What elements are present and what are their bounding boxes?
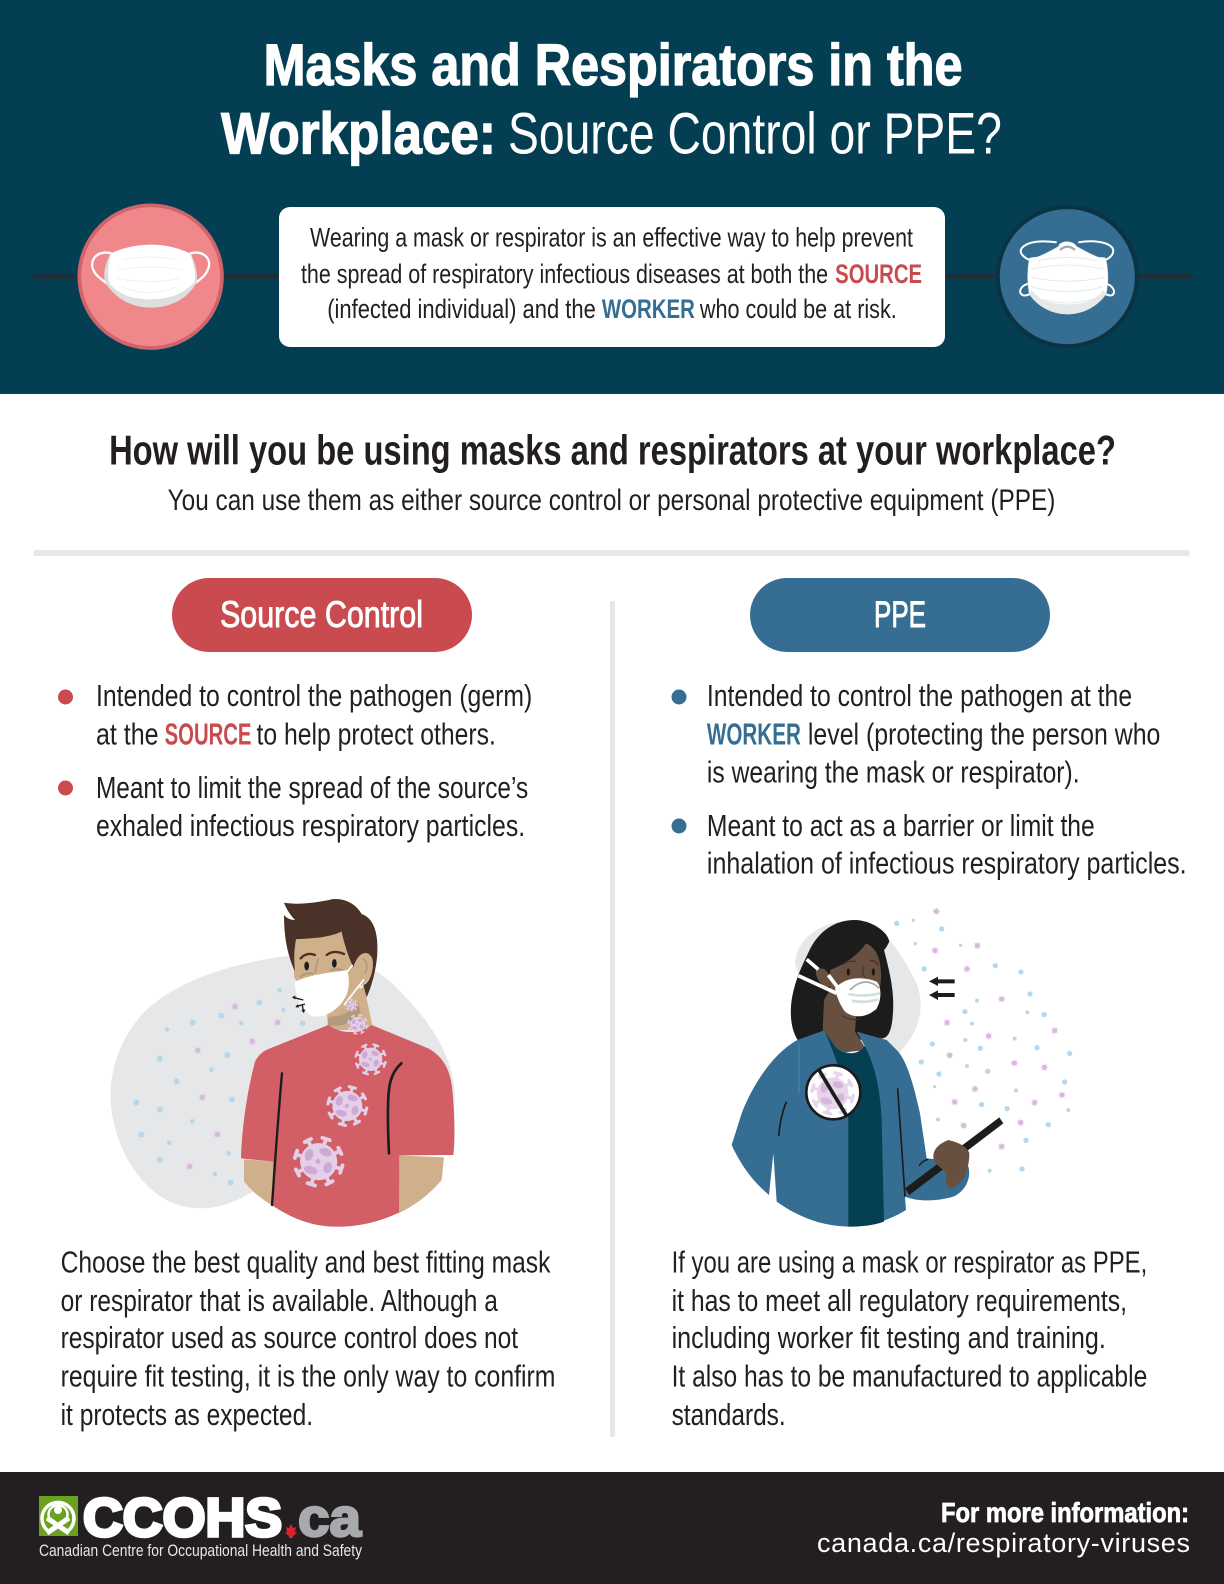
PPE guidance text <box>672 1246 1147 1432</box>
intro callout: SOURCE <box>835 258 922 289</box>
CCOHS logo: Canadian Centre for Occupational Health and Safety <box>39 1541 362 1560</box>
more information link: canada.ca/respiratory-viruses <box>817 1528 1190 1558</box>
title: Masks and Respirators in the <box>264 33 962 98</box>
main question heading: You can use them as either source control or personal protective equipment (PPE) <box>168 484 1055 517</box>
source control guidance text: Choose the best quality and best fitting mask <box>61 1246 551 1279</box>
title <box>221 33 1002 167</box>
illustration: woman wearing a respirator, particles blocked <box>732 908 1072 1227</box>
panel: source control <box>58 578 555 1432</box>
PPE guidance text: standards. <box>672 1399 786 1432</box>
source control bullets <box>58 680 532 843</box>
panel: PPE <box>672 578 1187 1432</box>
PPE bullets: is wearing the mask or respirator). <box>707 757 1080 790</box>
CCOHS logo: ca <box>298 1488 362 1548</box>
header band <box>0 0 1224 394</box>
intro callout: Wearing a mask or respirator is an effective way to help prevent <box>310 221 913 252</box>
source control bullets: Meant to limit the spread of the source’s <box>96 772 528 805</box>
PPE guidance text: it has to meet all regulatory requirements, <box>672 1285 1127 1318</box>
intro callout: who could be at risk. <box>699 293 897 324</box>
pill: source control: Source Control <box>220 594 423 635</box>
source control bullets: to help protect others. <box>257 718 496 751</box>
more information link <box>817 1497 1190 1558</box>
CCOHS logo: CCOHS <box>83 1488 282 1548</box>
pill: source control <box>172 578 472 652</box>
title: Source Control or PPE? <box>508 102 1002 167</box>
icon: inward arrows <box>929 977 955 1000</box>
source control guidance text: require fit testing, it is the only way to confirm <box>61 1361 555 1394</box>
PPE bullets <box>672 680 1187 881</box>
source control guidance text <box>61 1246 555 1432</box>
source control bullets: exhaled infectious respiratory particles. <box>96 810 525 843</box>
source control bullets: SOURCE <box>165 718 251 751</box>
intro callout <box>279 207 945 347</box>
PPE guidance text: including worker fit testing and training. <box>672 1322 1106 1355</box>
source control guidance text: respirator used as source control does not <box>61 1322 519 1355</box>
intro callout: WORKER <box>602 293 695 324</box>
icon: surgical mask <box>79 205 222 348</box>
PPE bullets: WORKER <box>707 718 801 751</box>
illustration: man exhaling particles through a mask <box>111 899 455 1227</box>
intro callout: (infected individual) and the <box>327 293 596 324</box>
pill: PPE: PPE <box>874 594 926 635</box>
source control guidance text: or respirator that is available. Although a <box>61 1285 498 1318</box>
footer band <box>0 1472 1224 1584</box>
icon: respirator mask <box>998 207 1137 346</box>
CCOHS logo <box>39 1488 362 1560</box>
PPE bullets: Meant to act as a barrier or limit the <box>707 810 1095 843</box>
source control bullets: Intended to control the pathogen (germ) <box>96 680 532 713</box>
source control guidance text: it protects as expected. <box>61 1399 313 1432</box>
pill: PPE <box>750 578 1050 652</box>
source control bullets: at the <box>96 718 159 751</box>
title: Workplace: <box>221 102 496 167</box>
PPE bullets: Intended to control the pathogen at the <box>707 680 1132 713</box>
main question heading <box>109 428 1116 517</box>
intro callout: the spread of respiratory infectious diseases at both the <box>301 258 828 289</box>
